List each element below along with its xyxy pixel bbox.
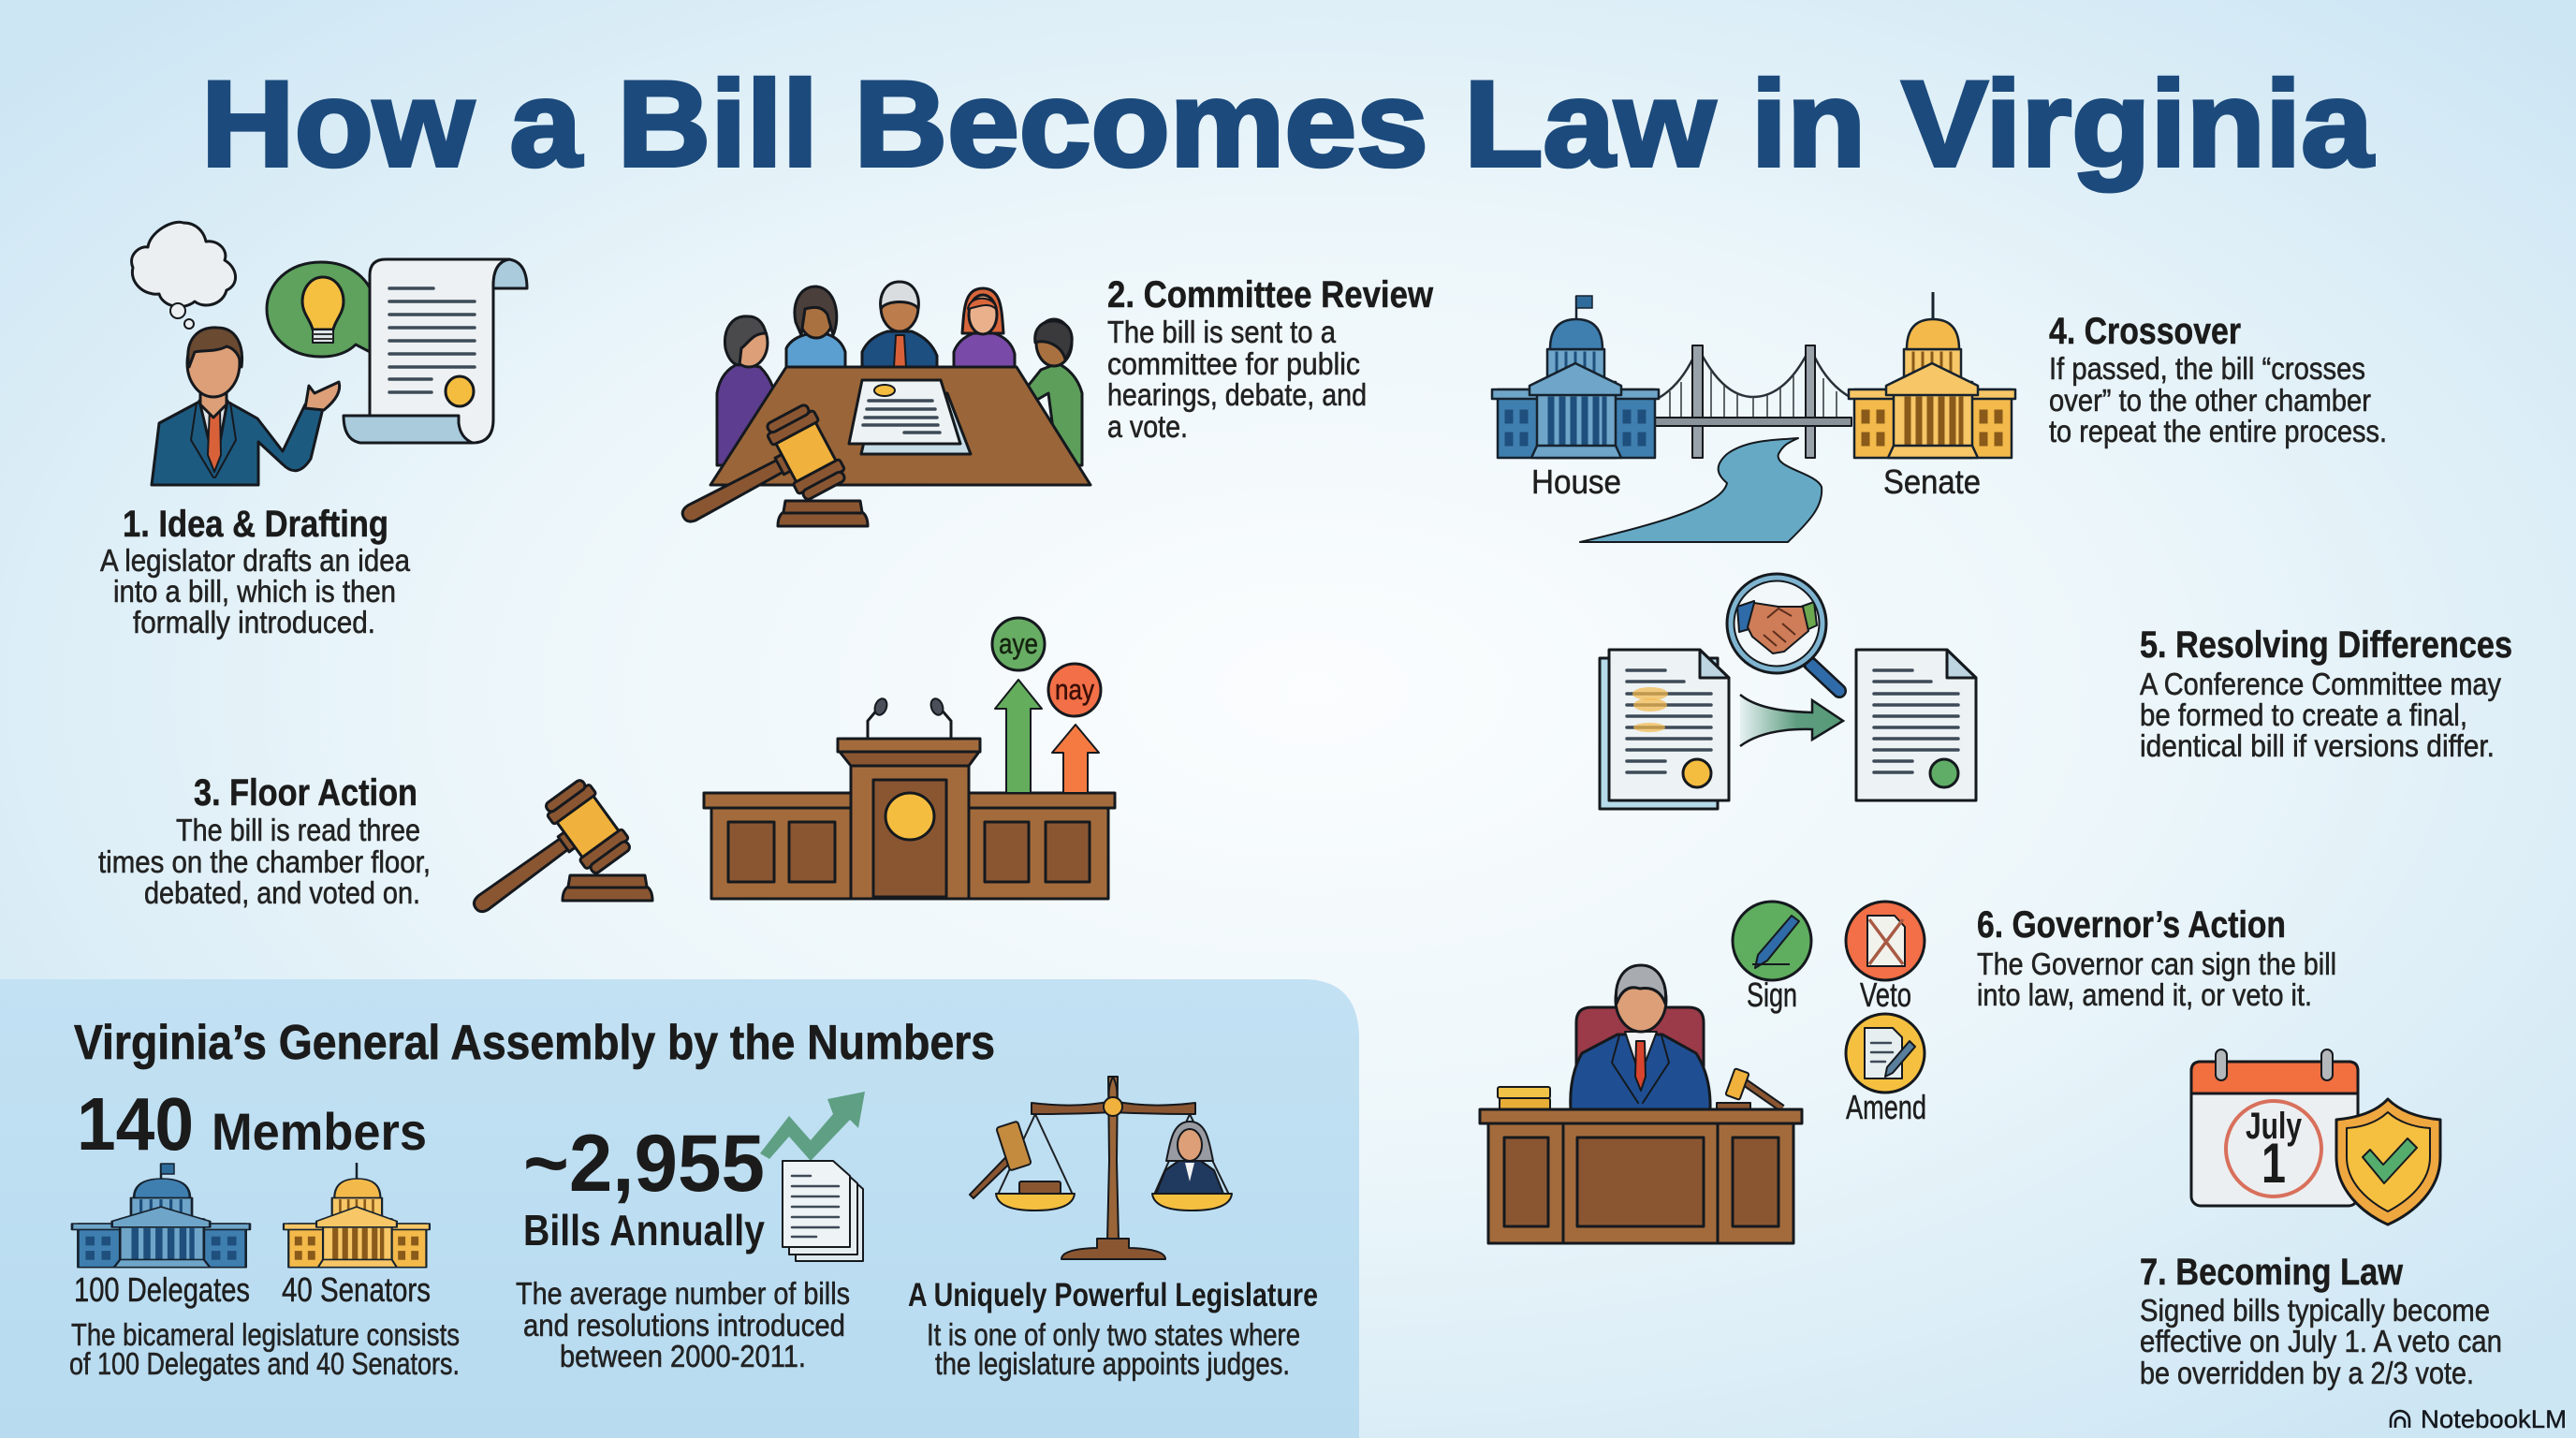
label: sign: Sign: [1747, 976, 1797, 1014]
text: bills description: between 2000-2011.: [560, 1339, 806, 1373]
step 3 body: debated, and voted on.: [144, 875, 420, 910]
step 3 heading: 3. Floor Action: [194, 772, 417, 814]
panel: general assembly by the numbers: [0, 979, 1359, 1438]
person: left member: [717, 316, 777, 465]
step 2 body: [1107, 315, 1367, 444]
gavel on table: [664, 402, 868, 555]
icon: governor at desk: [1480, 965, 1802, 1243]
label: veto: Veto: [1860, 976, 1911, 1014]
step 6: governor's action: [1480, 902, 2336, 1243]
step 1 body: formally introduced.: [133, 605, 375, 639]
icon: sign: [1733, 902, 1811, 980]
step 7: becoming law: [2140, 1049, 2502, 1390]
step 4 body: [2049, 351, 2387, 448]
step 5 body: identical bill if versions differ.: [2140, 728, 2495, 763]
highlight heading: uniquely powerful legislature: A Uniquely Powerful Legislature: [908, 1277, 1318, 1313]
table top: [710, 367, 1090, 485]
icon: podium and bench: [704, 697, 1115, 899]
step 2 body: committee for public: [1107, 346, 1360, 381]
stat: bills count: ~2,955: [523, 1119, 765, 1209]
icon: bill scroll: [344, 259, 527, 443]
icon: veto: [1846, 902, 1925, 980]
text: bills description: and resolutions introduced: [523, 1308, 845, 1343]
icon: house building: [1492, 296, 1659, 458]
person: green member: [982, 319, 1082, 465]
panel heading: Virginia’s General Assembly by the Numbers: [74, 1016, 995, 1070]
step 2 body: hearings, debate, and: [1107, 377, 1367, 412]
icon: suspension bridge: [1655, 345, 1852, 458]
step 1 body: A legislator drafts an idea: [100, 543, 411, 578]
step 2 body: The bill is sent to a: [1107, 315, 1337, 349]
label: 40 senators: 40 Senators: [282, 1270, 431, 1309]
icon: legislator: [152, 328, 340, 485]
label: senate: Senate: [1883, 462, 1981, 501]
text: bills description: The average number of bills: [516, 1276, 850, 1311]
text: bicameral description: of 100 Delegates and 40 Senators.: [69, 1346, 460, 1381]
bill papers: [849, 380, 971, 454]
step 4 body: to repeat the entire process.: [2049, 414, 2387, 448]
text: bicameral description: [69, 1317, 460, 1381]
stat: 140 members: 140: [77, 1082, 194, 1166]
label: 100 delegates: 100 Delegates: [74, 1270, 250, 1309]
icon: calendar: 1: [2261, 1132, 2286, 1195]
label: amend: Amend: [1846, 1088, 1926, 1126]
icon: aye arrow and badge: [992, 618, 1045, 793]
person: blue member: [786, 286, 845, 367]
text: bills description: [516, 1276, 850, 1373]
icon: senators building: [284, 1163, 430, 1268]
step 4 heading: 4. Crossover: [2049, 311, 2241, 352]
text: judges description: the legislature appoints judges.: [935, 1346, 1290, 1381]
icon: draft document: [1600, 650, 1729, 809]
icon: senate building: [1849, 292, 2015, 458]
step 3: floor action: [98, 618, 1115, 943]
icon: committee table: [664, 282, 1090, 555]
step 7 body: [2140, 1293, 2502, 1390]
step 3 body: The bill is read three: [176, 813, 420, 847]
text: bicameral description: The bicameral legislature consists: [71, 1317, 460, 1352]
step 1 body: into a bill, which is then: [113, 574, 396, 609]
icon: aye arrow and badge: aye: [999, 627, 1038, 660]
step 1 body: [100, 543, 411, 639]
icon: scales of justice: [970, 1077, 1232, 1259]
icon: arrow: [1740, 695, 1843, 746]
step 5 body: [2140, 667, 2501, 763]
step 6 body: into law, amend it, or veto it.: [1977, 977, 2312, 1012]
step 6 heading: 6. Governor’s Action: [1977, 904, 2286, 946]
step 7 body: effective on July 1. A veto can: [2140, 1324, 2502, 1358]
icon: amend: [1846, 1014, 1925, 1093]
person: navy member: [862, 282, 937, 367]
step 1: idea and drafting: [100, 222, 527, 639]
step 4 body: If passed, the bill “crosses: [2049, 351, 2365, 386]
stat label: members: Members: [212, 1102, 427, 1161]
step 5 body: be formed to create a final,: [2140, 697, 2467, 732]
icon: river: [1580, 438, 1822, 542]
icon: thought cloud: [132, 222, 236, 329]
step 6 body: The Governor can sign the bill: [1977, 946, 2336, 981]
icon: rising trend arrow: [760, 1092, 865, 1161]
icon: final document: [1856, 650, 1976, 800]
step 2 heading: 2. Committee Review: [1107, 274, 1434, 315]
person: red-haired member: [954, 288, 1015, 367]
icon: nay arrow and badge: nay: [1055, 673, 1094, 706]
step 6 body: [1977, 946, 2336, 1012]
text: judges description: It is one of only two states where: [927, 1317, 1300, 1352]
icon: light bulb speech bubble: [267, 262, 381, 358]
icon: shield: [2336, 1099, 2440, 1225]
step 5: resolving differences: [1600, 574, 2512, 809]
notebooklm logo: NotebookLM: [2421, 1405, 2567, 1433]
title: How a Bill Becomes Law in Virginia: [201, 55, 2375, 192]
icon: calendar: [2191, 1049, 2358, 1206]
step 5 heading: 5. Resolving Differences: [2140, 624, 2512, 666]
step 1 heading: 1. Idea & Drafting: [123, 504, 388, 545]
icon: delegates building: [72, 1164, 250, 1268]
step 2 body: a vote.: [1107, 409, 1188, 444]
step 2: committee review: [664, 274, 1434, 555]
step 7 heading: 7. Becoming Law: [2140, 1252, 2404, 1293]
step 4 body: over” to the other chamber: [2049, 383, 2371, 418]
icon: nay arrow and badge: [1048, 664, 1101, 793]
step 3 body: [98, 813, 431, 910]
step 7 body: Signed bills typically become: [2140, 1293, 2490, 1328]
step 3 body: times on the chamber floor,: [98, 844, 431, 879]
text: judges description: [927, 1317, 1300, 1381]
icon: calendar: July: [2246, 1106, 2303, 1147]
step 7 body: be overridden by a 2/3 vote.: [2140, 1356, 2474, 1390]
icon: gavel: [450, 776, 652, 943]
step 5 body: A Conference Committee may: [2140, 667, 2501, 701]
icon: magnifier with handshake: [1727, 574, 1839, 691]
label: house: House: [1531, 462, 1621, 501]
icon: stack of bills: [783, 1161, 863, 1261]
stat label: bills annually: Bills Annually: [523, 1206, 765, 1255]
step 4: crossover: [1492, 292, 2387, 542]
